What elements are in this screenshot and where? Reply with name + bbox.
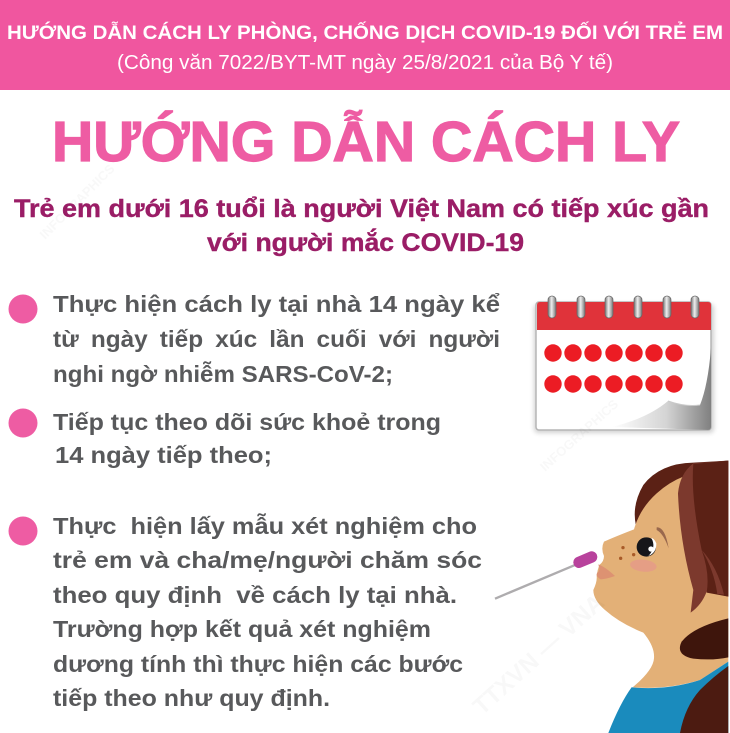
lips	[597, 564, 615, 579]
hair highlight streak	[702, 550, 724, 595]
bullet 2: Tiếp tục theo dõi sức khoẻ trong	[53, 409, 441, 435]
bullet 3: tiếp theo như quy định.	[53, 685, 330, 711]
bullet 3	[8, 512, 482, 711]
bullet 3: Trường hợp kết quả xét nghiệm	[53, 616, 431, 642]
bullet 1: từ ngày tiếp xúc lần cuối với người	[53, 326, 500, 352]
back hair	[635, 461, 728, 597]
bullet 2: 14 ngày tiếp theo;	[55, 442, 272, 468]
bullet 1: nghi ngờ nhiễm SARS-CoV-2;	[53, 360, 393, 387]
dark hair section	[693, 461, 728, 597]
eye	[637, 537, 656, 557]
shirt	[608, 662, 728, 733]
bullet 2	[8, 408, 441, 468]
watermarks: INFOGRAPHICS	[37, 161, 118, 242]
icon: calendar	[534, 296, 714, 433]
subheading	[14, 195, 709, 257]
watermarks: INFOGRAPHICS	[537, 396, 621, 474]
bullet 3: trẻ em và cha/mẹ/người chăm sóc	[53, 547, 482, 573]
lower hair	[680, 666, 728, 733]
header subtitle: (Công văn 7022/BYT-MT ngày 25/8/2021 của Bộ Y tế)	[117, 52, 613, 74]
header title: HƯỚNG DẪN CÁCH LY PHÒNG, CHỐNG DỊCH COVID-19 ĐỐI VỚI TRẺ EM	[7, 20, 723, 44]
neck and face	[593, 477, 728, 688]
swab tip	[579, 557, 592, 562]
watermarks	[37, 161, 621, 720]
bullet 3: Thực hiện lấy mẫu xét nghiệm cho	[53, 512, 477, 539]
front hair lock	[678, 461, 728, 613]
swab stick	[495, 564, 577, 599]
hair bun shadow	[680, 618, 728, 659]
freckles	[619, 546, 635, 560]
subheading: Trẻ em dưới 16 tuổi là người Việt Nam có tiếp xúc gần	[14, 195, 709, 223]
subheading: với người mắc COVID-19	[207, 227, 524, 257]
bullet 3: theo quy định về cách ly tại nhà.	[53, 582, 457, 608]
bullet 1: Thực hiện cách ly tại nhà 14 ngày kể	[53, 291, 500, 317]
header band	[0, 0, 730, 90]
watermarks: TTXVN — VNA	[468, 589, 610, 720]
bullet 1	[8, 291, 500, 387]
cheek	[629, 558, 657, 573]
main title: HƯỚNG DẪN CÁCH LY	[52, 109, 680, 174]
eyebrow	[657, 527, 669, 548]
bullet 3: dương tính thì thực hiện các bước	[53, 651, 463, 677]
icon: child with nasal swab	[495, 461, 728, 733]
